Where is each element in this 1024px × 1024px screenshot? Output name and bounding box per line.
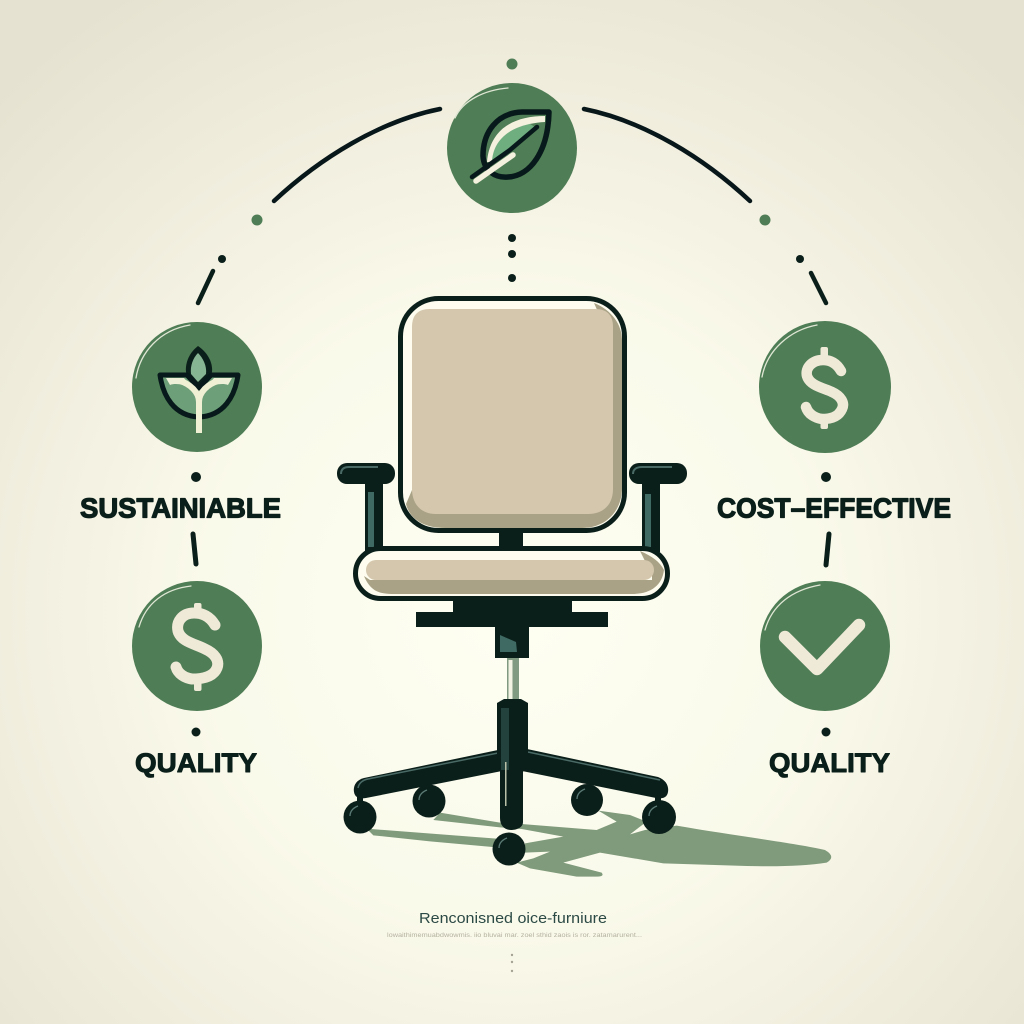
footer title: Renconisned oice-furniure <box>419 910 607 927</box>
footer subtext: lowaithimemuabdwowmis. iio bluvai mar. zoel sthid zaois is ror. zatamarurent... <box>387 932 642 939</box>
connector arcs and dots <box>191 58 831 736</box>
icon: dollar (right upper) <box>759 321 891 453</box>
label: sustainiable: SUSTAINIABLE <box>80 492 281 524</box>
seat mount <box>416 598 608 658</box>
footer dots <box>511 954 513 972</box>
armrests <box>337 463 687 552</box>
icon: leaf (top) <box>447 83 577 213</box>
back support neck <box>499 531 523 549</box>
chair <box>337 298 687 866</box>
label: quality right: QUALITY <box>769 748 890 778</box>
icon: checkmark (right lower) <box>760 581 890 711</box>
label: cost-effective: COST–EFFECTIVE <box>717 492 951 524</box>
backrest <box>400 298 624 530</box>
icon: sprout (left upper) <box>132 322 262 452</box>
label: quality left: QUALITY <box>135 748 257 778</box>
seat <box>356 548 668 598</box>
chair shadow <box>367 811 831 877</box>
gas piston <box>507 658 519 702</box>
icon: dollar (left lower) <box>132 581 262 711</box>
casters <box>344 784 676 866</box>
base legs <box>354 699 668 830</box>
